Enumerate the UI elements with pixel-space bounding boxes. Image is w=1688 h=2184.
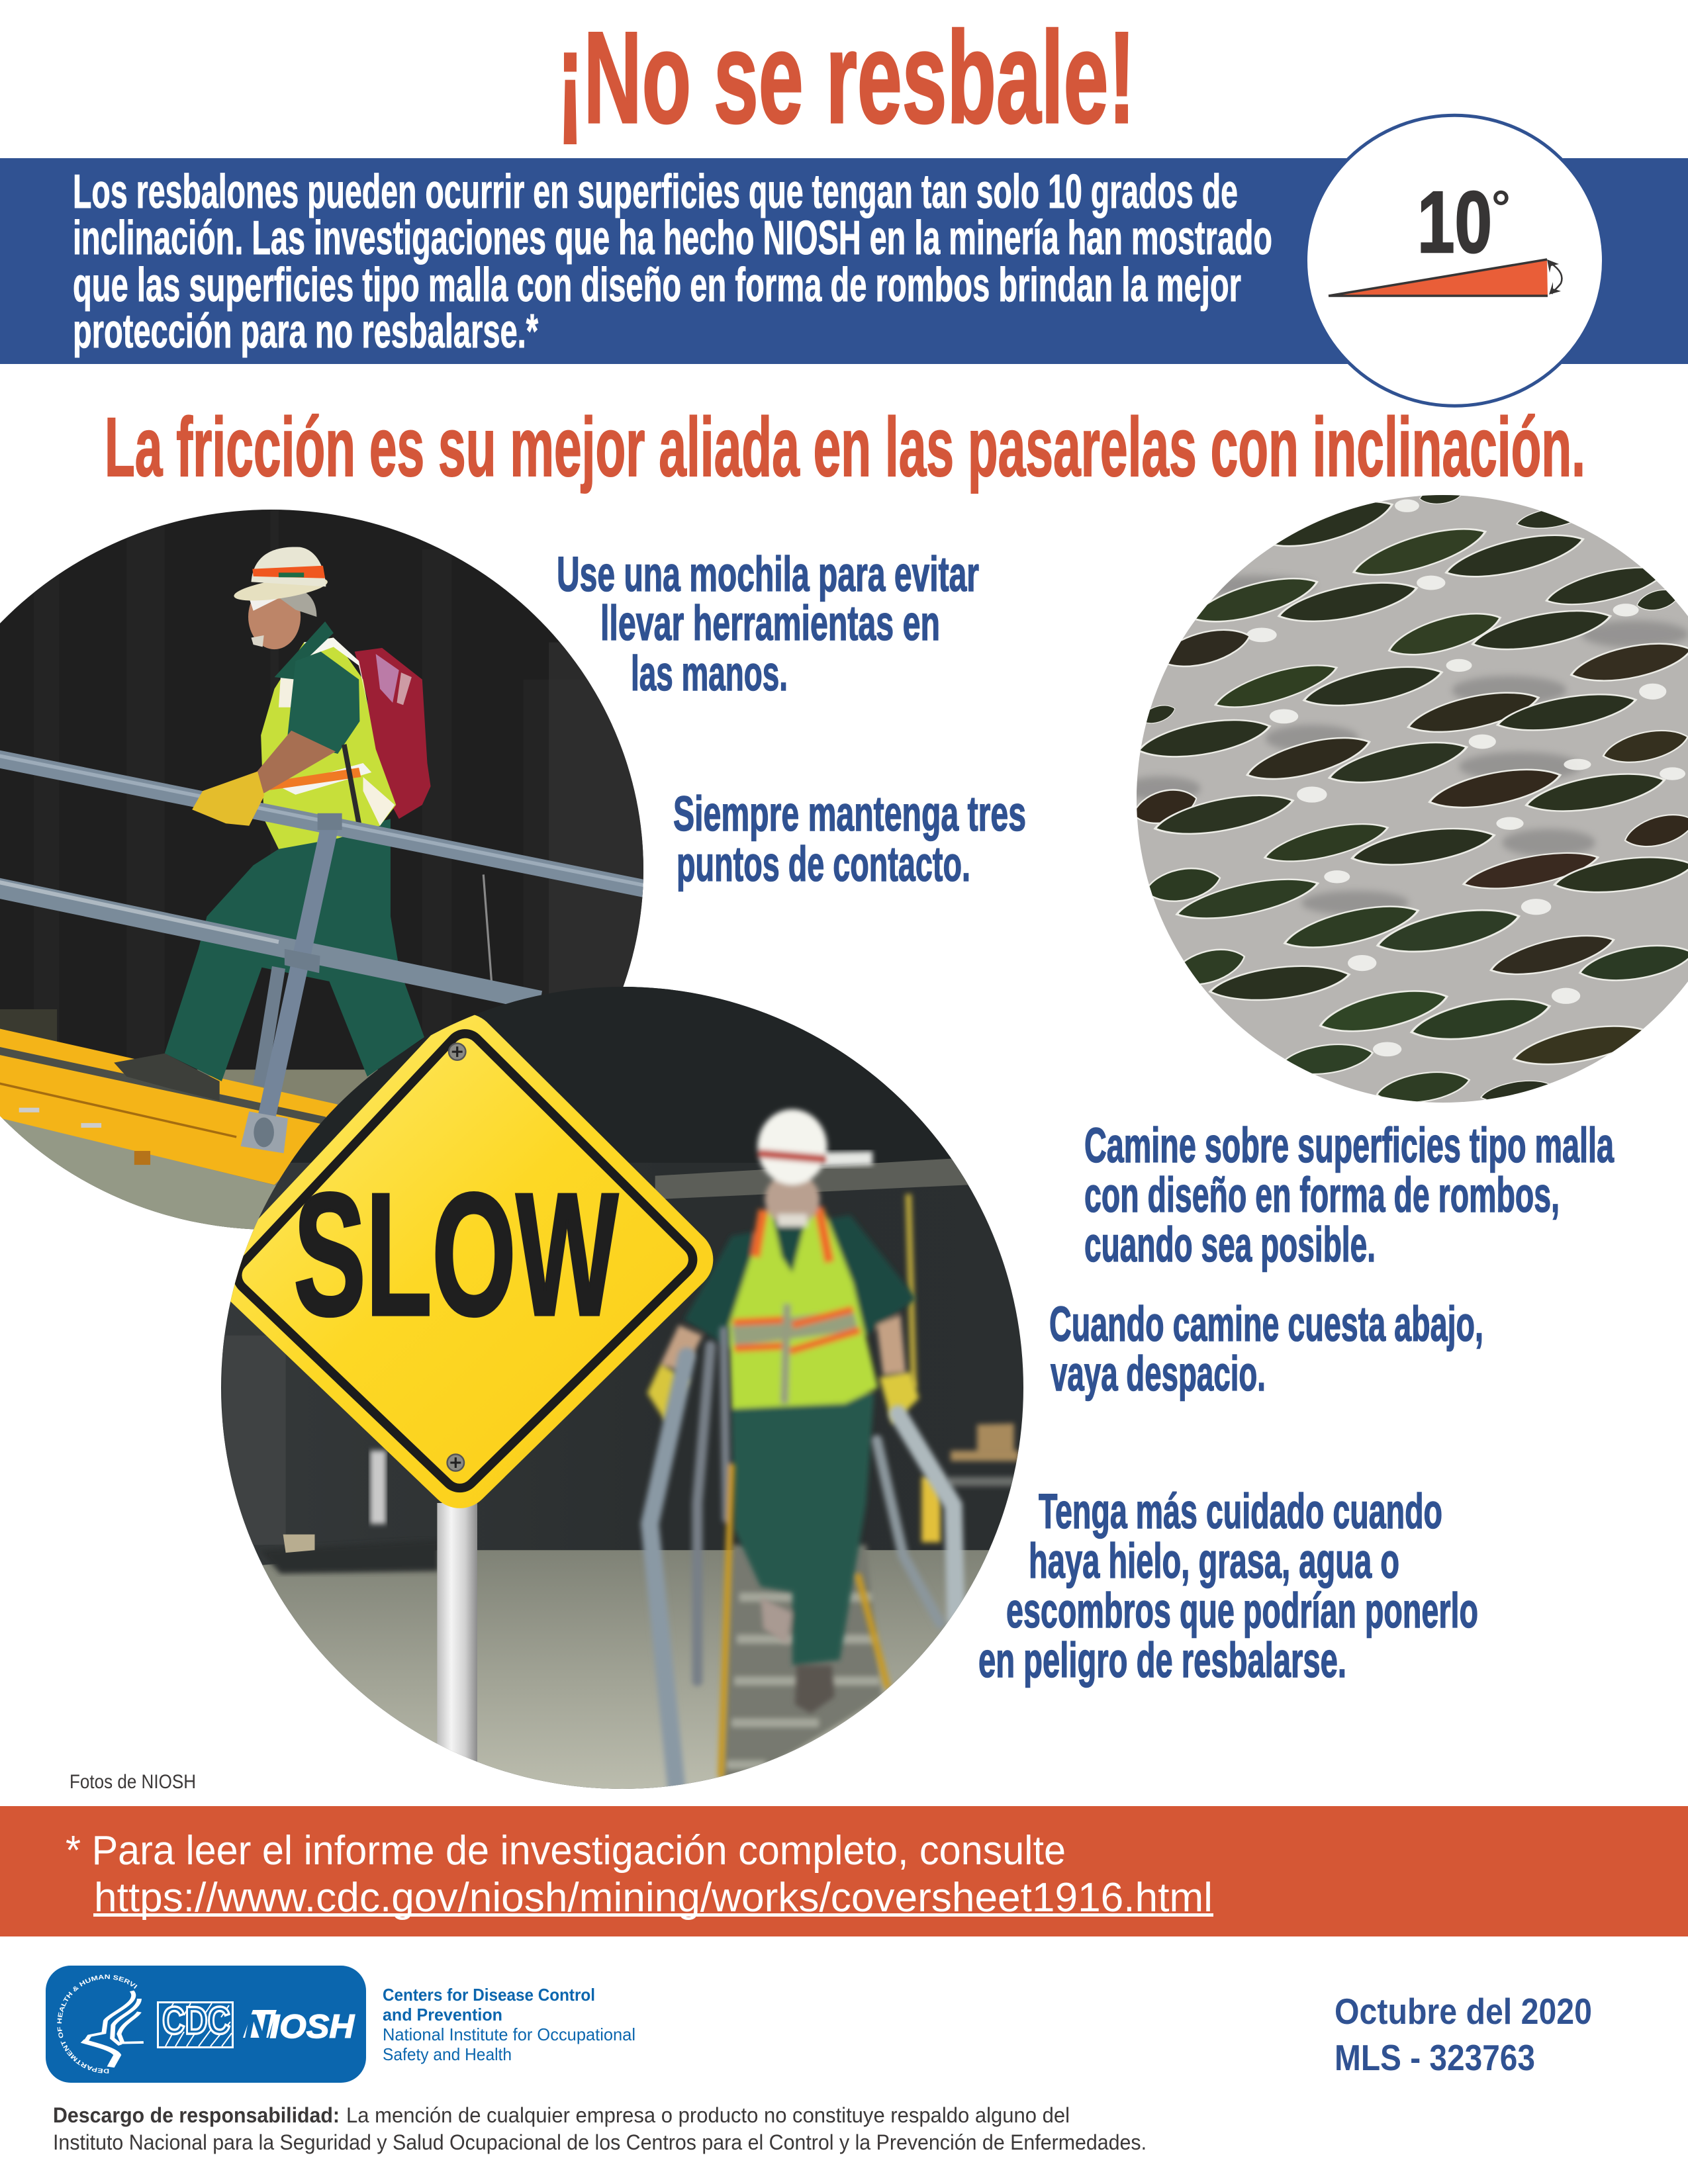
screws <box>447 1044 465 1471</box>
incline wedge <box>1329 259 1562 296</box>
instruction: go slowly downhill <box>1049 1297 1483 1401</box>
icon: NIOSH wordmark: NIOSH <box>245 2008 355 2045</box>
intro text <box>73 165 1272 358</box>
agency names <box>383 1985 635 2064</box>
instruction: backpack: Use una mochila para evitar <box>557 547 979 602</box>
date and publication number: Octubre del 2020 <box>1335 1991 1592 2032</box>
ramp <box>0 1028 338 1185</box>
agency names: and Prevention <box>383 2005 502 2025</box>
report url: https://www.cdc.gov/niosh/mining/works/coversheet1916.html <box>94 1875 1213 1921</box>
instruction: three points of contact: puntos de contacto. <box>677 837 970 891</box>
instruction: mesh surfaces: cuando sea posible. <box>1084 1217 1376 1272</box>
instruction: extra care: Tenga más cuidado cuando <box>1039 1484 1442 1539</box>
walkway hand rails <box>650 1330 956 1786</box>
intro text: protección para no resbalarse.* <box>73 305 538 358</box>
instruction: backpack <box>557 547 979 701</box>
sign text: SLOW <box>294 1158 619 1352</box>
instruction: extra care <box>978 1484 1478 1688</box>
10 degrees label: 10 <box>1417 173 1492 271</box>
walkway <box>721 1545 882 1786</box>
icon: CDC box: CDC <box>162 1999 230 2042</box>
slow sign <box>249 1044 682 1477</box>
instruction: backpack: las manos. <box>631 646 788 701</box>
agency names: Centers for Disease Control <box>383 1985 595 2005</box>
10 degrees label: ° <box>1491 181 1511 234</box>
photo: slow sign and worker walking down <box>212 979 1056 1817</box>
instruction: mesh surfaces <box>1084 1118 1615 1272</box>
panel: blue intro band <box>0 158 1688 364</box>
instruction: extra care: haya hielo, grasa, agua o <box>1029 1533 1399 1588</box>
hand rails <box>0 755 644 1154</box>
background equipment <box>908 1194 1019 1542</box>
glove <box>192 772 264 826</box>
instruction: three points of contact <box>673 786 1026 891</box>
curtain stand <box>483 874 492 986</box>
agency names: National Institute for Occupational <box>383 2025 635 2044</box>
report text: * Para leer el informe de investigación completo, consulte <box>66 1828 1066 1874</box>
title: ¡No se resbale! <box>557 5 1135 150</box>
agency names: Safety and Health <box>383 2044 512 2064</box>
instruction: three points of contact: Siempre mantenga tres <box>673 786 1026 841</box>
photo credit: Fotos de NIOSH <box>70 1771 196 1793</box>
logo: HHS CDC NIOSH <box>46 1966 366 2083</box>
icon: HHS seal: DEPARTMENT OF HEALTH & HUMAN SERVICES·USA <box>57 1975 138 2073</box>
worker walking <box>647 1109 919 1713</box>
photo: steel diamond mesh grating <box>1122 486 1688 1132</box>
instruction: go slowly downhill: vaya despacio. <box>1051 1346 1266 1401</box>
photo: worker with backpack on ramp <box>0 510 643 1230</box>
sign pole <box>437 1503 477 1764</box>
date and publication number <box>1335 1991 1592 2078</box>
panel: orange report link band <box>0 1806 1688 1936</box>
worker <box>114 547 431 1101</box>
icon: HHS seal <box>57 1975 170 2073</box>
icon: 10 degree incline badge <box>1305 115 1603 406</box>
disclaimer: La mención de cualquier empresa o producto no constituye respaldo alguno del <box>346 2103 1070 2127</box>
instruction: backpack: llevar herramientas en <box>600 596 940 651</box>
disclaimer: Instituto Nacional para la Seguridad y Salud Ocupacional de los Centros para el Control y la Prevención de Enfermedades. <box>53 2130 1147 2154</box>
instruction: extra care: en peligro de resbalarse. <box>978 1633 1346 1688</box>
date and publication number: MLS - 323763 <box>1335 2037 1535 2078</box>
disclaimer <box>53 2103 1147 2154</box>
disclaimer: Descargo de responsabilidad: <box>53 2103 340 2127</box>
